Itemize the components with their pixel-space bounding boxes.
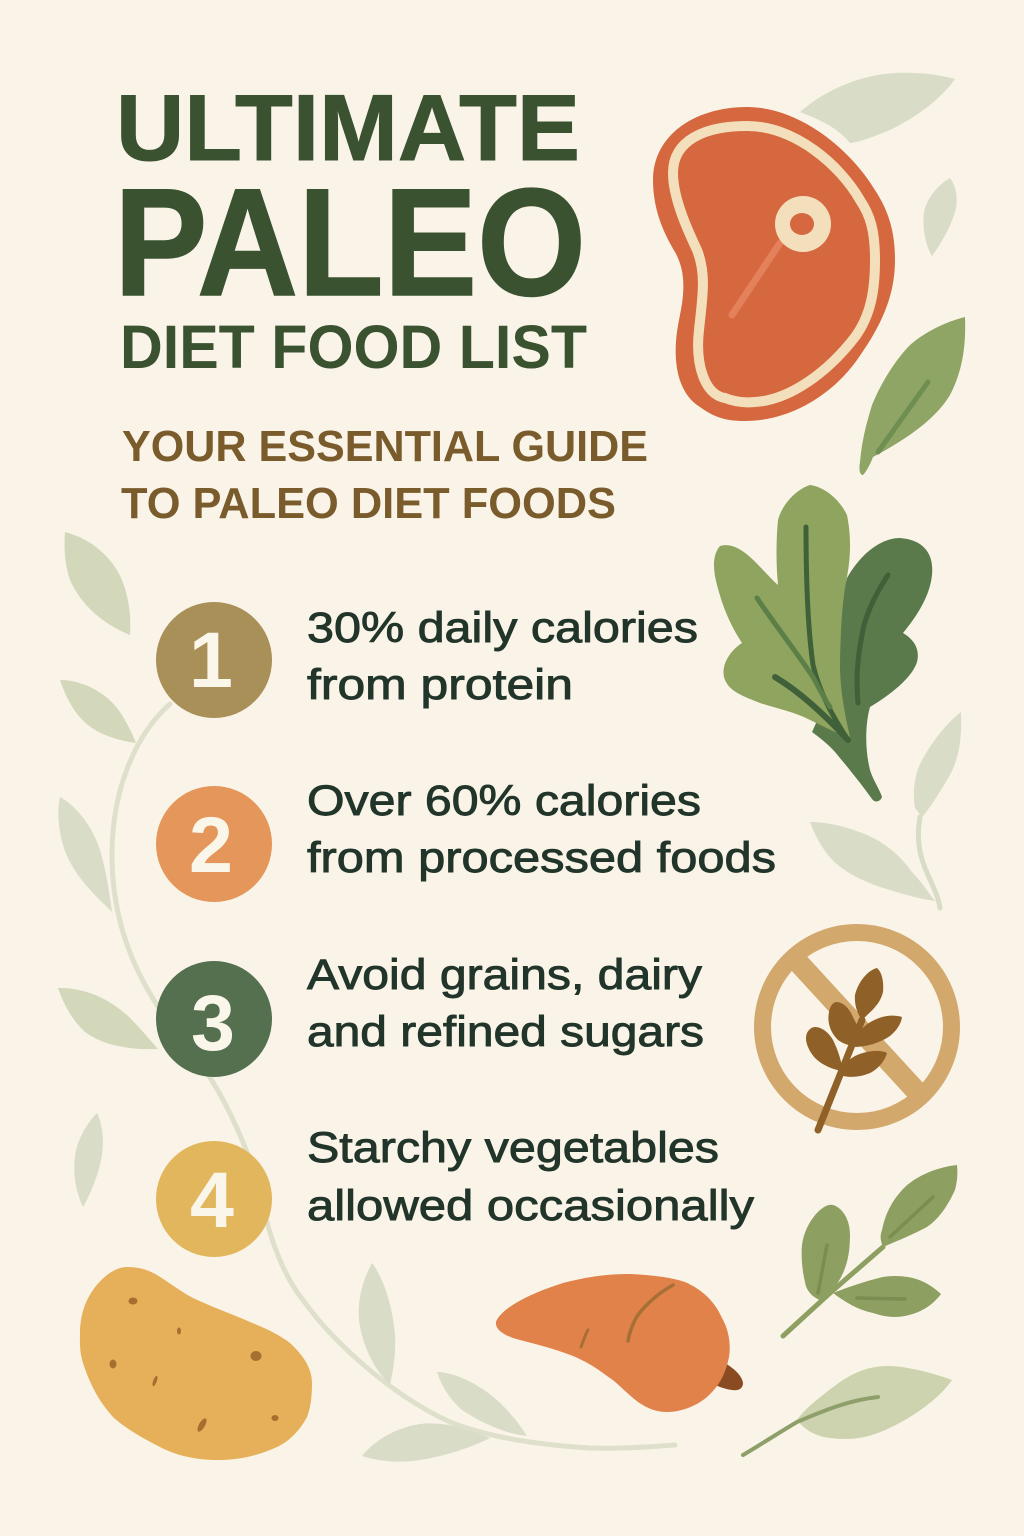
step 4 text: allowed occasionally	[307, 1182, 755, 1230]
icon: steak	[653, 107, 895, 421]
icon: pale leaf bottom right	[743, 1366, 952, 1455]
badge 3	[156, 961, 272, 1077]
step 2 text	[307, 777, 776, 882]
subtitle	[121, 422, 648, 528]
badge 2	[156, 786, 272, 902]
badge 1	[156, 602, 272, 718]
step 3 text: Avoid grains, dairy	[307, 951, 703, 999]
step 2 text: Over 60% calories	[307, 777, 701, 825]
badge 1: 1	[189, 615, 233, 704]
step 1 text: 30% daily calories	[307, 604, 698, 652]
step 2 text: from processed foods	[307, 834, 776, 882]
icon: leafy green	[714, 485, 932, 801]
step 1 text: from protein	[307, 661, 573, 709]
badge 4: 4	[190, 1155, 234, 1244]
step 1	[156, 602, 698, 718]
title: ULTIMATE	[116, 75, 580, 180]
title: DIET FOOD LIST	[120, 313, 587, 381]
step 3 text	[307, 951, 704, 1056]
title: PALEO	[114, 157, 586, 328]
icon: small green leaf	[859, 317, 965, 475]
icon: green sprig	[783, 1165, 957, 1336]
badge 4	[156, 1141, 272, 1257]
background vine with leaves	[58, 532, 675, 1462]
step 4	[156, 1124, 755, 1257]
step 2	[156, 777, 776, 902]
icon: no grains	[762, 932, 952, 1130]
step 1 text	[307, 604, 698, 709]
subtitle: YOUR ESSENTIAL GUIDE	[122, 422, 648, 471]
title	[114, 75, 587, 381]
step 4 text: Starchy vegetables	[307, 1124, 719, 1172]
badge 3: 3	[191, 978, 235, 1067]
badge 2: 2	[189, 800, 233, 889]
step 3	[156, 951, 704, 1077]
icon: potato	[80, 1267, 312, 1460]
subtitle: TO PALEO DIET FOODS	[121, 479, 616, 528]
icon: sweet potato	[496, 1274, 743, 1412]
step 3 text: and refined sugars	[307, 1008, 704, 1056]
leaf sprig: pale right	[810, 712, 961, 908]
leaf: top right pale	[800, 73, 957, 256]
step 4 text	[307, 1124, 755, 1230]
